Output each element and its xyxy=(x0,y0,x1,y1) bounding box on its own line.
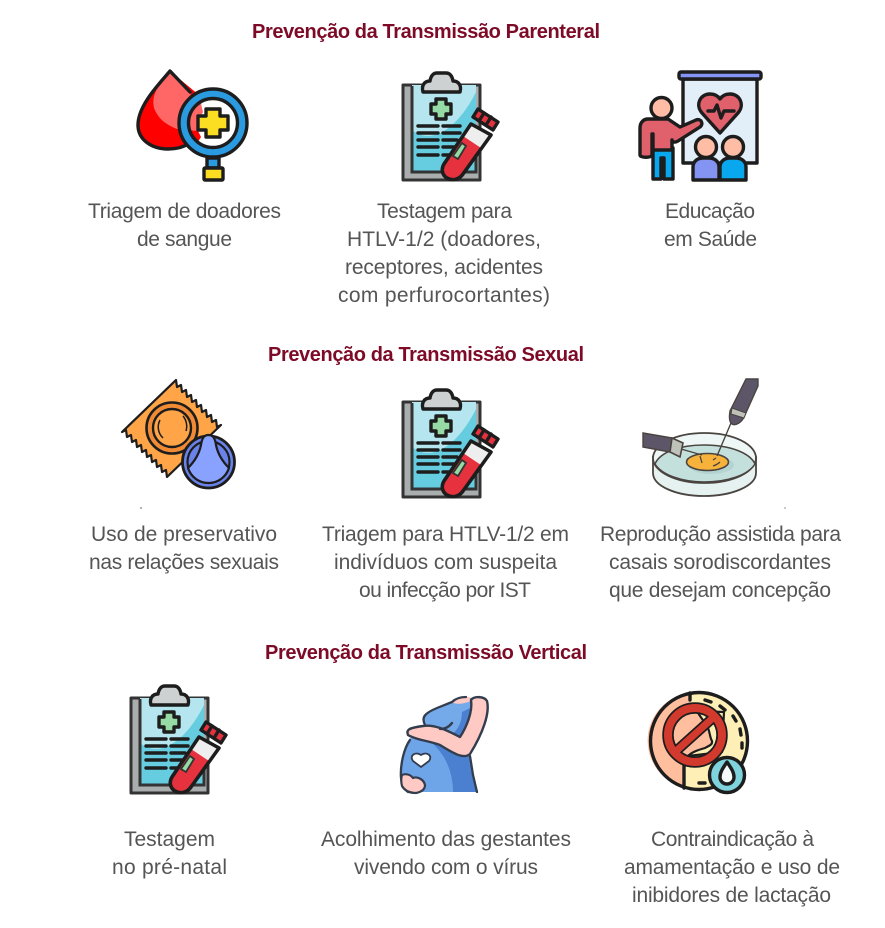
text: testagem no pré-natal xyxy=(112,828,227,879)
text: acolhimento das gestantes: Acolhimento das gestantes xyxy=(321,828,571,851)
icon: blood drop with magnifier xyxy=(138,71,247,180)
text: triagem para HTLV: indivíduos com suspeita xyxy=(334,551,557,574)
text: reprodução assistida: casais sorodiscordantes xyxy=(609,551,831,574)
icon: breastfeeding contraindication xyxy=(648,692,748,792)
text: testagem para HTLV: HTLV-1/2 (doadores, xyxy=(347,228,541,251)
text: uso de preservativo: nas relações sexuais xyxy=(89,551,279,574)
text: contraindicação à amamentação: inibidores de lactação xyxy=(632,884,831,907)
text: acolhimento das gestantes xyxy=(321,828,571,879)
text: educação em saúde xyxy=(664,200,757,251)
icon: health education presentation xyxy=(640,72,761,180)
icon: clipboard with test tube xyxy=(403,390,498,497)
text: triagem de doadores xyxy=(88,200,281,251)
text: uso de preservativo xyxy=(89,523,279,574)
text: testagem para HTLV xyxy=(338,200,550,307)
text: testagem no pré-natal: no pré-natal xyxy=(112,856,227,879)
icon: pregnant woman xyxy=(400,697,488,793)
text: testagem para HTLV: receptores, acidentes xyxy=(345,256,543,279)
text: testagem para HTLV: Testagem para xyxy=(377,200,512,223)
text: contraindicação à amamentação xyxy=(624,828,840,907)
text: contraindicação à amamentação: Contraindicação à xyxy=(651,828,814,851)
text: reprodução assistida xyxy=(600,523,841,602)
text: testagem no pré-natal: Testagem xyxy=(124,828,215,851)
text: triagem para HTLV: ou infecção por IST xyxy=(359,579,531,602)
text: triagem para HTLV: Triagem para HTLV-1/2 em xyxy=(322,523,569,546)
icon: clipboard with test tube xyxy=(131,686,226,793)
text: educação em saúde: em Saúde xyxy=(664,228,757,251)
text: reprodução assistida: Reprodução assistida para xyxy=(600,523,841,546)
title: prevenção parenteral: Prevenção da Transmissão Parenteral xyxy=(252,21,600,43)
title: prevenção vertical: Prevenção da Transmissão Vertical xyxy=(265,642,587,664)
text: contraindicação à amamentação: amamentação e uso de xyxy=(624,856,840,879)
text: triagem de doadores: Triagem de doadores xyxy=(88,200,281,223)
text: triagem de doadores: de sangue xyxy=(137,228,232,251)
text: uso de preservativo: Uso de preservativo xyxy=(91,523,277,546)
text: educação em saúde: Educação xyxy=(665,200,755,223)
text: reprodução assistida: que desejam concepção xyxy=(609,579,831,602)
title: prevenção sexual: Prevenção da Transmissão Sexual xyxy=(268,344,584,366)
icon: condom xyxy=(122,380,234,508)
text: acolhimento das gestantes: vivendo com o vírus xyxy=(354,856,538,879)
icon: petri dish with pipettes xyxy=(643,379,786,508)
text: testagem para HTLV: com perfurocortantes) xyxy=(338,284,550,307)
icon: clipboard with test tube xyxy=(403,73,498,180)
text: triagem para HTLV xyxy=(322,523,569,602)
